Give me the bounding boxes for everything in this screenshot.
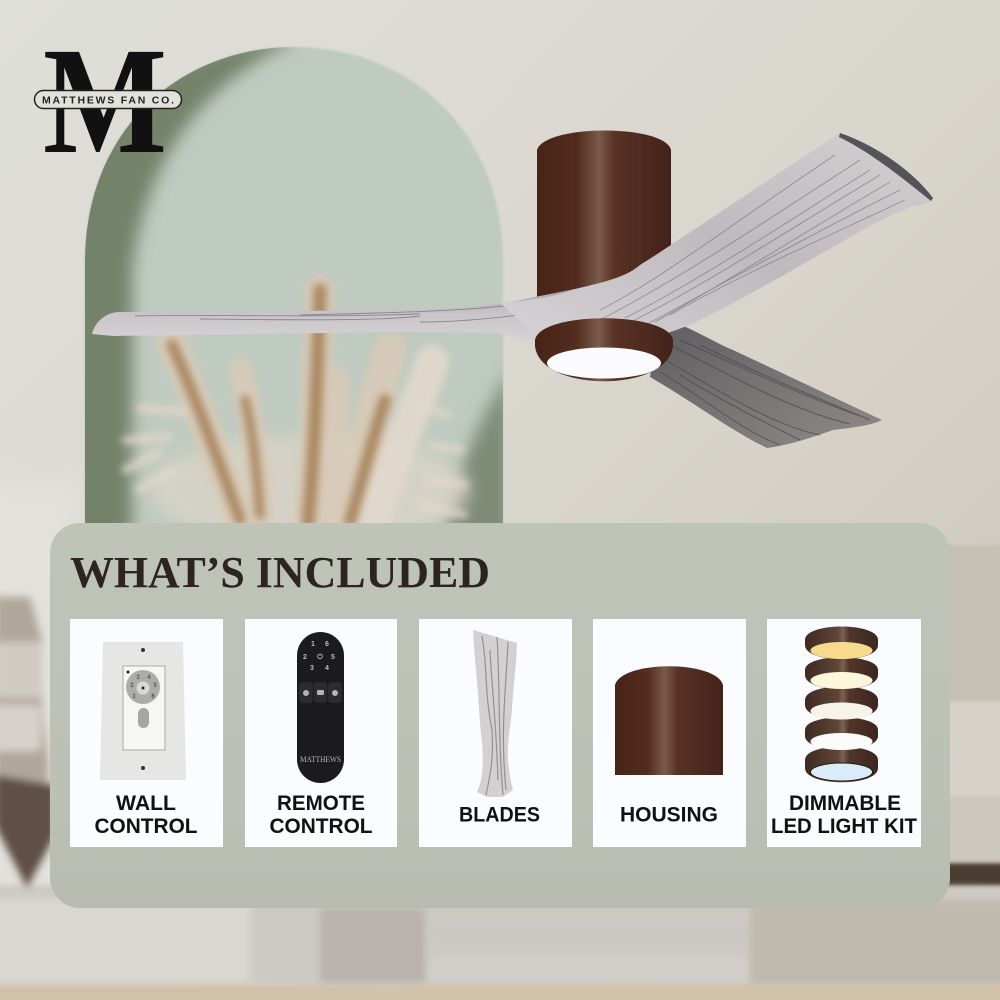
logo: M <box>43 17 167 186</box>
icon: remote <box>297 632 344 783</box>
back blade <box>650 322 882 448</box>
card: wall control: CONTROL <box>94 815 198 838</box>
icon: wall plate: 4 <box>147 675 151 681</box>
icon: housing <box>615 666 723 775</box>
icon: wall plate: 5 <box>153 683 157 689</box>
card: blades: BLADES <box>459 804 540 826</box>
icon: wall plate <box>100 642 186 780</box>
right blade <box>500 133 933 342</box>
card: remote control: CONTROL <box>270 815 373 838</box>
logo: MATTHEWS FAN CO. <box>42 94 174 106</box>
ceiling fan <box>92 130 933 448</box>
arch niche <box>84 46 504 523</box>
card: remote control <box>245 619 397 847</box>
card: blades <box>419 619 572 847</box>
panel <box>50 523 950 908</box>
light ring <box>535 318 673 381</box>
icon: remote: 4 <box>325 665 329 672</box>
LED light <box>547 348 661 378</box>
card: remote control: REMOTE <box>277 792 365 815</box>
card: LED light kit: LED LIGHT KIT <box>771 815 917 838</box>
icon: blade <box>473 630 517 797</box>
left blade <box>92 289 620 345</box>
card: housing <box>593 619 746 847</box>
icon: remote: MATTHEWS <box>300 755 341 764</box>
icon: remote: 1 <box>311 641 315 648</box>
heading: WHAT’S INCLUDED <box>70 548 490 597</box>
card: LED light kit: DIMMABLE <box>789 792 901 815</box>
icon: wall plate: 2 <box>130 683 134 689</box>
icon: remote: 3 <box>310 665 314 672</box>
sofa right <box>940 545 1000 885</box>
icon: wall plate: 1 <box>132 694 136 700</box>
icon: wall plate: 3 <box>136 675 140 681</box>
sofa left with cushion <box>0 597 55 888</box>
card: wall control <box>70 619 223 847</box>
card: LED light kit <box>767 619 921 847</box>
icon: wall plate: 6 <box>151 694 155 700</box>
icon: remote: ⏻ <box>317 653 323 661</box>
card: wall control: WALL <box>116 792 176 815</box>
card: housing: HOUSING <box>620 804 718 826</box>
icon: remote: 6 <box>325 641 329 648</box>
icon: remote: 5 <box>331 654 335 661</box>
icon: remote: 2 <box>303 654 307 661</box>
icon: light rings <box>805 626 878 782</box>
housing <box>537 130 671 300</box>
pampas grass <box>125 290 470 545</box>
